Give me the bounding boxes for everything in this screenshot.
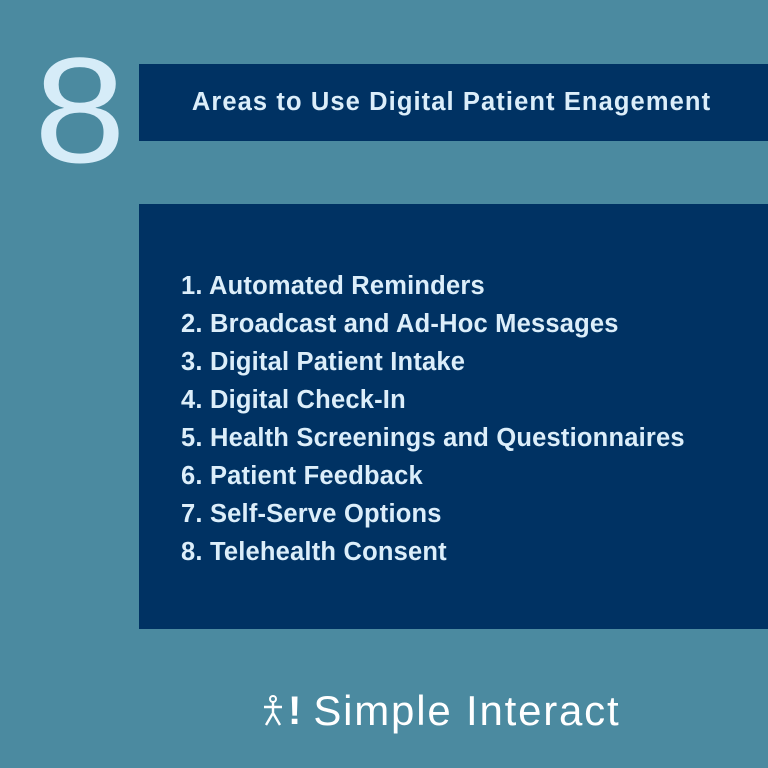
list items [181,272,685,566]
list items: 1. Automated Reminders [181,272,485,300]
title banner: Areas to Use Digital Patient Enagement [192,88,711,116]
icon: person [264,695,282,726]
list items: 7. Self-Serve Options [181,500,442,528]
list items: 4. Digital Check-In [181,386,406,414]
list items: 6. Patient Feedback [181,462,423,490]
list items: 5. Health Screenings and Questionnaires [181,424,685,452]
logo: Simple Interact [313,687,620,734]
list items: 8. Telehealth Consent [181,538,447,566]
list items: 3. Digital Patient Intake [181,348,465,376]
big number 8: 8 [34,26,126,194]
list items: 2. Broadcast and Ad-Hoc Messages [181,310,619,338]
logo: ! [288,688,301,732]
title banner [139,64,768,141]
panel: list [139,204,768,629]
